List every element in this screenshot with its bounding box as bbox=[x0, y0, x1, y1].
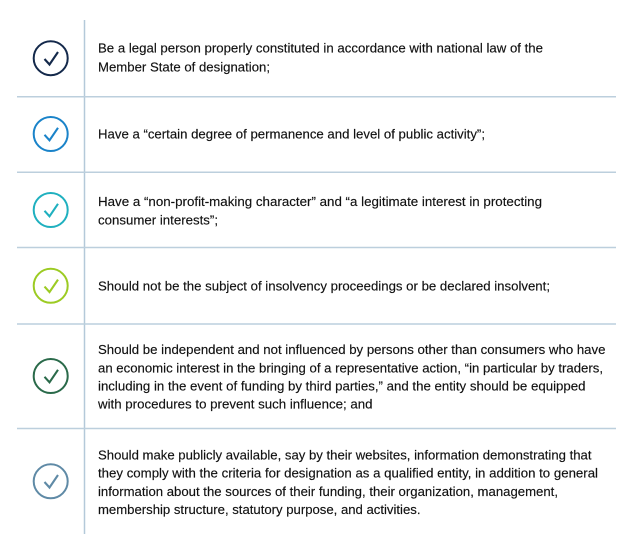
icon: lime check bbox=[34, 269, 68, 303]
text: independent bbox=[97, 342, 606, 411]
text: non-profit bbox=[98, 194, 542, 228]
text: publicly available: information about the sources of their funding, their organization, management, bbox=[98, 484, 558, 499]
text: non-profit: consumer interests”; bbox=[98, 212, 218, 228]
text: publicly available: they comply with the criteria for designation as a qualified entity, in addition to general bbox=[98, 466, 598, 480]
text: permanence: Have a “certain degree of permanence and level of public activity”; bbox=[98, 126, 485, 142]
text: legal person: Member State of designation; bbox=[98, 60, 270, 74]
text: insolvency: Should not be the subject of insolvency proceedings or be declared insolvent; bbox=[98, 278, 550, 294]
text: legal person bbox=[98, 40, 543, 74]
text: independent: including in the event of funding by third parties,” and the entity should be equipped bbox=[98, 378, 586, 393]
text: independent: an economic interest in the bringing of a representative action, “in particular by traders, bbox=[98, 360, 603, 375]
icon: blue check bbox=[34, 117, 68, 151]
text: publicly available: membership structure, statutory purpose, and activities. bbox=[98, 502, 420, 517]
text: non-profit: Have a “non-profit-making character” and “a legitimate interest in protecting bbox=[98, 194, 542, 209]
text: publicly available: Should make publicly available, say by their websites, information demonstrating that bbox=[98, 448, 592, 462]
text: independent: with procedures to prevent such influence; and bbox=[97, 396, 373, 411]
icon: green check bbox=[34, 359, 68, 393]
icon: navy check bbox=[34, 41, 68, 75]
text: legal person: Be a legal person properly constituted in accordance with national law of the bbox=[98, 40, 543, 56]
icon: teal check bbox=[34, 193, 68, 227]
text: publicly available bbox=[98, 448, 598, 517]
text: independent: Should be independent and not influenced by persons other than consumers who have bbox=[98, 342, 606, 357]
icon: slate check bbox=[34, 464, 68, 498]
